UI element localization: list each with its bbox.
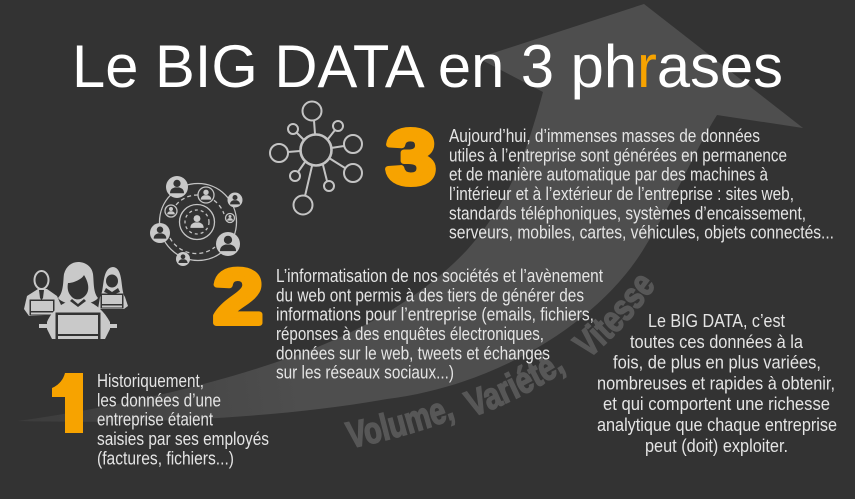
conclusion text: toutes ces données à la — [630, 332, 804, 352]
text block 2 — [276, 266, 603, 383]
text block 3: et de manière automatique par des machines à — [449, 165, 769, 185]
text block 2: du web ont permis à des tiers de générer des — [276, 285, 584, 305]
number 3: 3 — [386, 115, 436, 200]
text block 3: l’intérieur et à l’extérieur de l’entreprise : sites web, — [449, 184, 794, 204]
arrow label: Volume, Variété, Vitesse — [344, 276, 654, 448]
text block 2: réponses à des enquêtes électroniques, — [276, 324, 544, 344]
text block 1: saisies par ses employés — [97, 429, 269, 449]
growth arrow — [18, 4, 803, 422]
conclusion text: Le BIG DATA, c’est — [648, 311, 785, 331]
text block 1: entreprise étaient — [97, 410, 213, 430]
woman right — [98, 267, 128, 309]
text block 3: standards téléphoniques, systèmes d’encaissement, — [449, 203, 806, 223]
conclusion text: peut (doit) exploiter. — [645, 436, 788, 456]
text block 2: données sur le web, tweets et échanges — [276, 343, 550, 363]
conclusion text: nombreuses et rapides à obtenir, — [597, 373, 835, 393]
man left — [24, 271, 61, 316]
icon: employees at laptops — [24, 262, 128, 340]
number 2: 2 — [213, 255, 263, 340]
number 1: 1 — [49, 356, 99, 456]
text block 1: (factures, fichiers...) — [97, 448, 234, 468]
text block 3: utiles à l’entreprise sont générées en permanence — [449, 145, 787, 165]
conclusion text: fois, de plus en plus variées, — [613, 353, 821, 373]
conclusion text — [597, 311, 837, 456]
conclusion text: et qui comportent une richesse — [603, 394, 830, 414]
arrow label: Volume, Variété, Vitesse: Variété, — [462, 352, 566, 416]
arrow label: Volume, Variété, Vitesse: Volume, — [344, 403, 455, 448]
text block 1 — [97, 371, 269, 468]
text block 1: les données d’une — [97, 390, 221, 410]
text block 2: sur les réseaux sociaux...) — [276, 363, 454, 383]
text block 3 — [449, 126, 834, 243]
woman centre — [39, 262, 117, 340]
arrow label: Volume, Variété, Vitesse: Vitesse — [570, 276, 654, 355]
text block 3: Aujourd’hui, d’immenses masses de données — [449, 126, 760, 146]
icon: network hub — [270, 102, 362, 214]
text block 2: informations pour l’entreprise (emails, fichiers, — [276, 305, 594, 325]
text block 1: Historiquement, — [97, 371, 204, 391]
icon: connected people — [150, 176, 242, 266]
title: Le BIG DATA en 3 phrases — [72, 33, 783, 100]
text block 2: L’informatisation de nos sociétés et l’avènement — [276, 266, 603, 286]
